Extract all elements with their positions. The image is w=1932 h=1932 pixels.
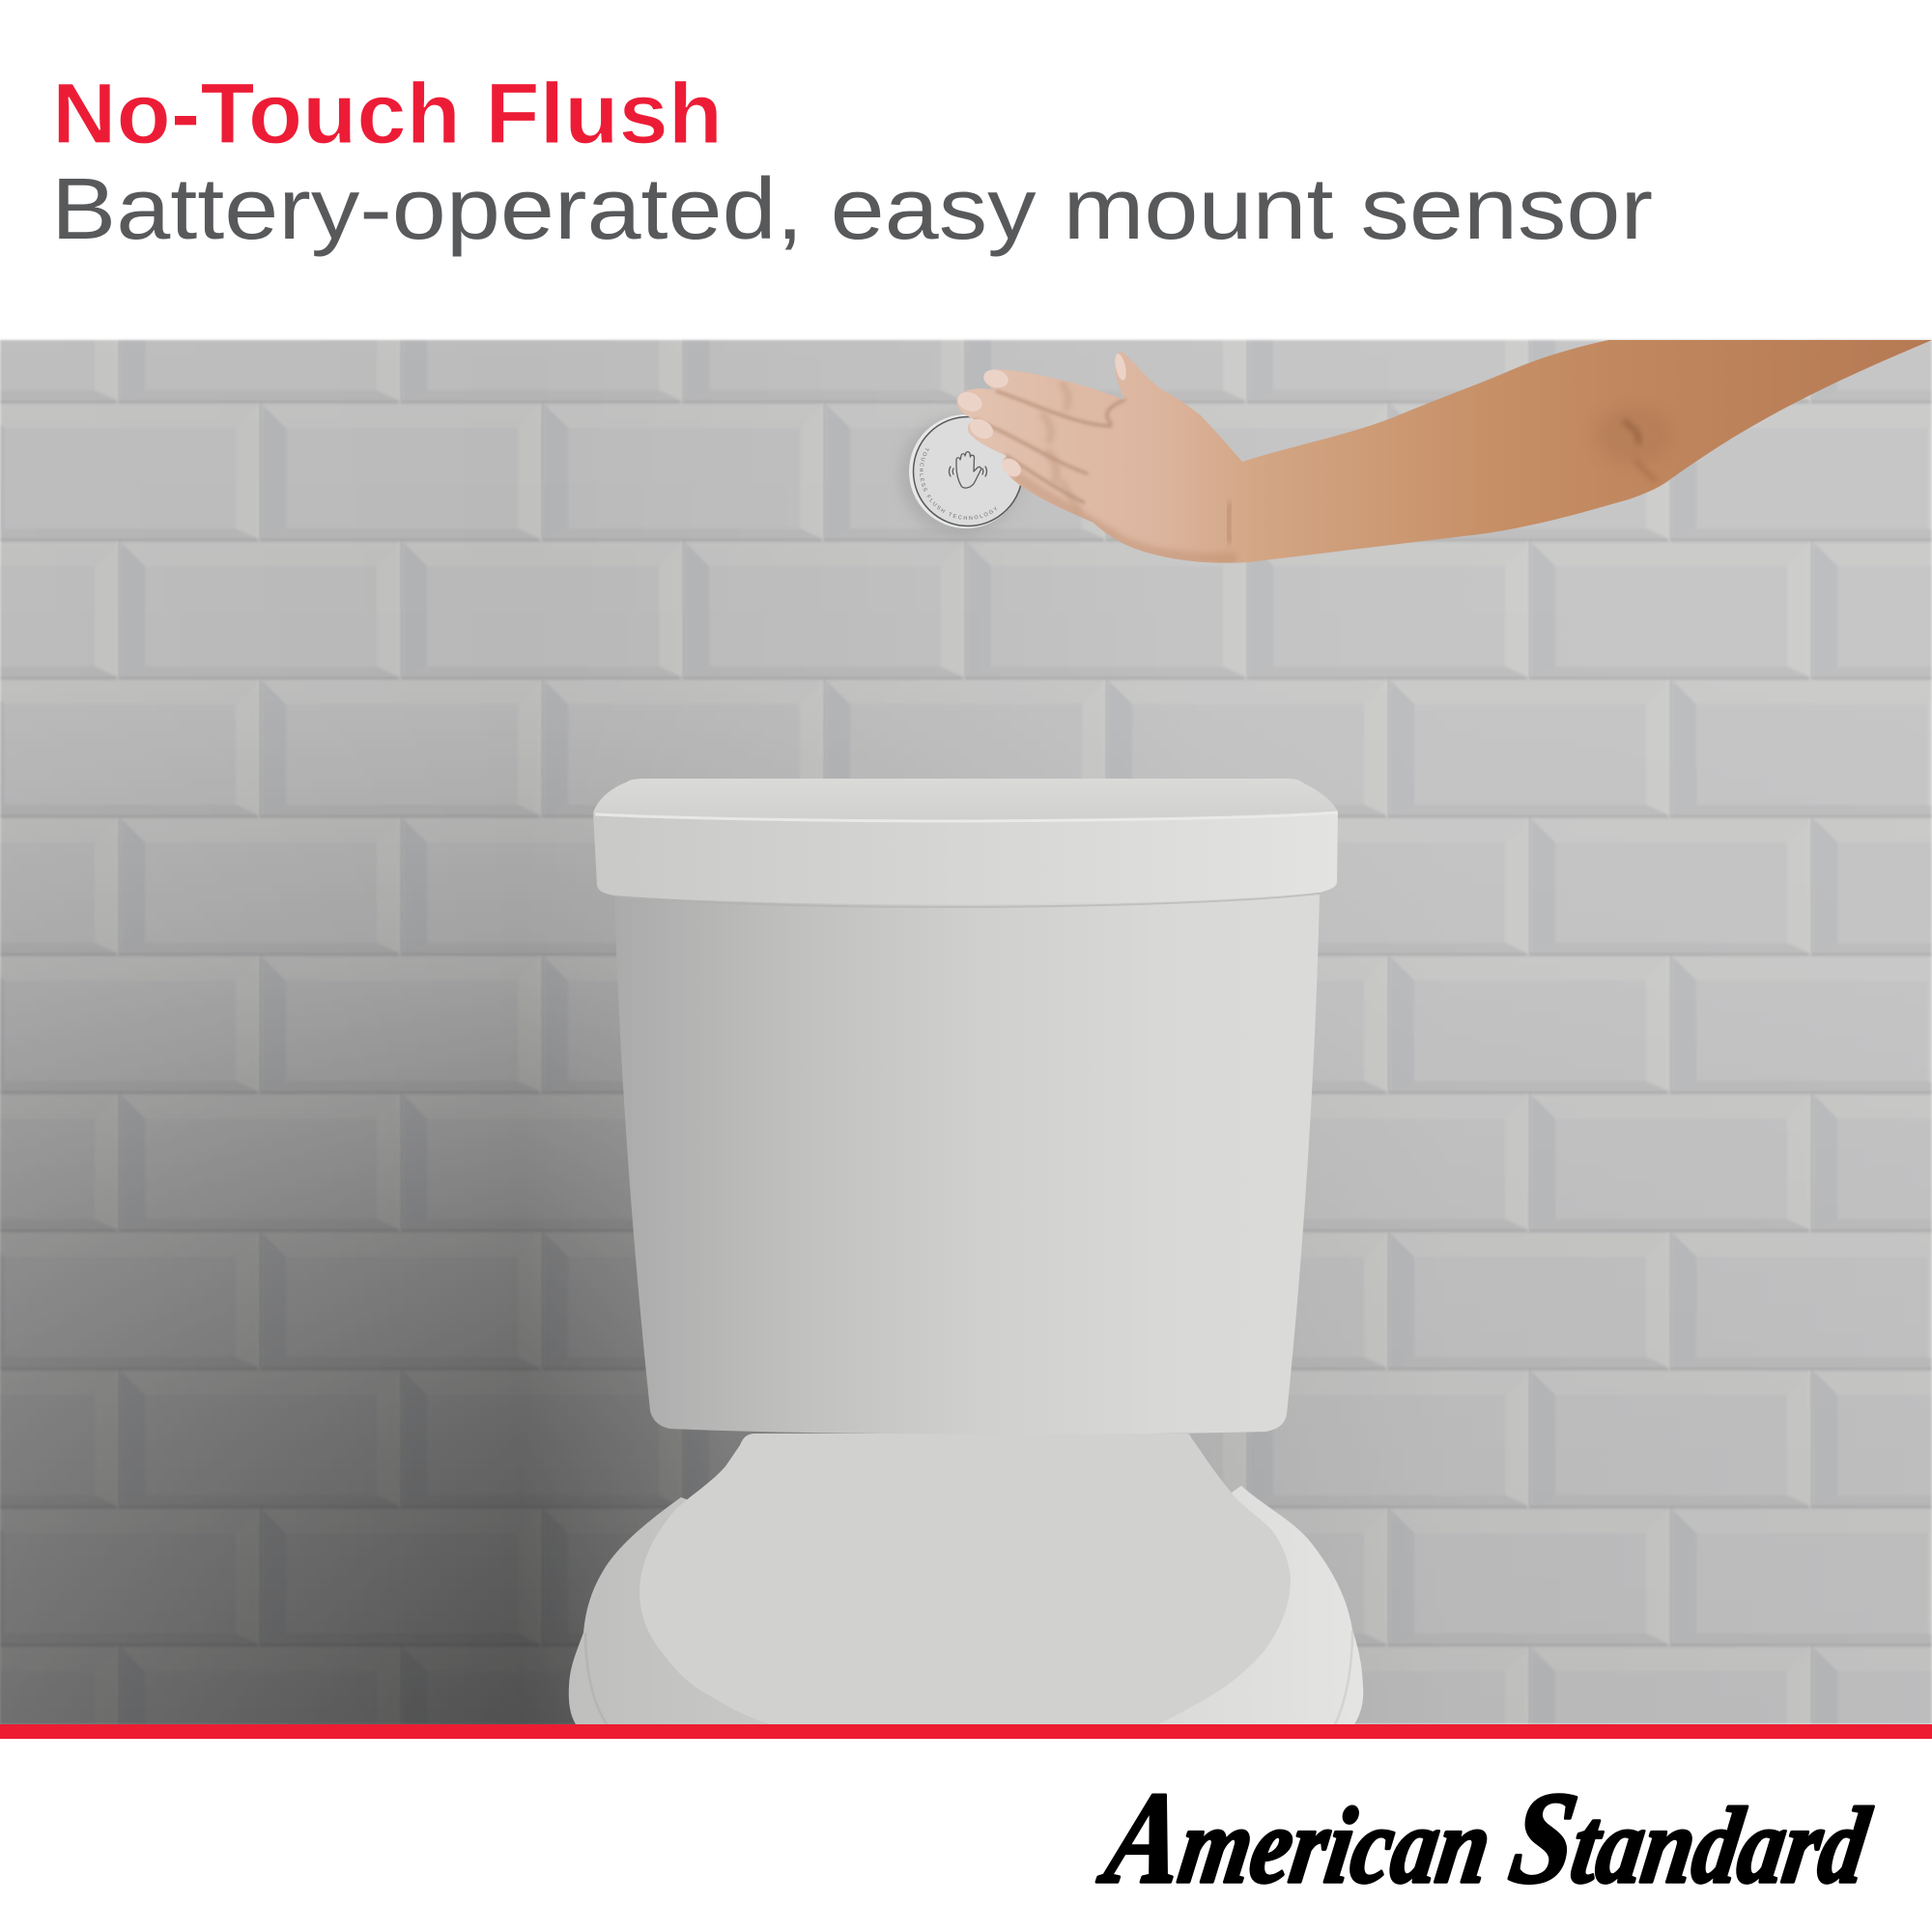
panel: bathroom photo scene: [0, 338, 1932, 1724]
knuckle wrinkles: [1043, 384, 1078, 510]
finger separations: [976, 391, 1124, 502]
wall-mounted sensor: [900, 414, 1022, 534]
wrist shading: [1228, 502, 1231, 543]
title: No-Touch Flush: [52, 65, 723, 161]
tile wall: [0, 340, 1932, 1724]
hand underside shadow: [1014, 475, 1236, 558]
sensor ring text: TOUCHLESS FLUSH TECHNOLOGY: [920, 448, 997, 520]
toilet tank body: [614, 894, 1320, 1435]
arm and hand: [947, 340, 1932, 572]
logo: American Standard: American Standard: [1092, 1765, 1881, 1911]
bowl lower rim lines: [585, 1631, 1352, 1724]
toilet tank lid: [593, 779, 1338, 907]
toilet bowl: [569, 1486, 1363, 1724]
subtitle: Battery-operated, easy mount sensor: [51, 161, 1653, 258]
elbow crease: [1602, 413, 1661, 481]
toilet seat lid: [639, 1434, 1291, 1724]
red divider bar: [0, 1724, 1932, 1739]
toilet: [569, 779, 1363, 1724]
fingernails: [954, 353, 1128, 480]
sensor hand icon: [949, 452, 987, 488]
